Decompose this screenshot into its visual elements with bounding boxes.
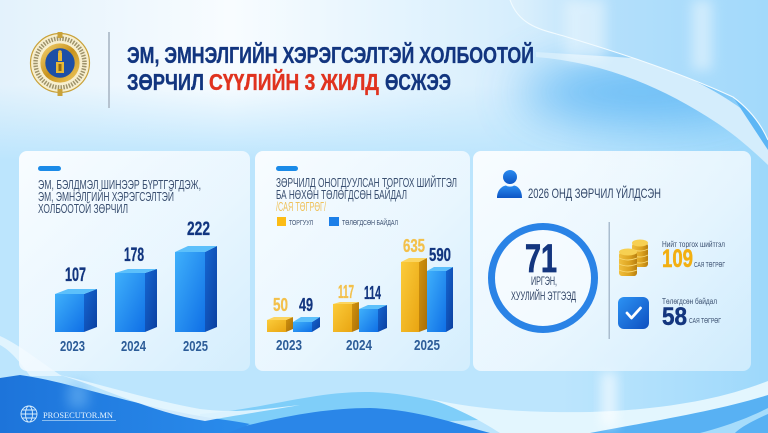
panel heading: 2026 ОНД ЗӨРЧИЛ ҮЙЛДСЭН (528, 184, 661, 201)
fine values (273, 236, 425, 315)
total fine label: Нийт торгох шийтгэл (662, 240, 725, 249)
fine values: 117 (338, 282, 354, 302)
paid label: Төлөгдсөн байдал (662, 297, 717, 306)
panel heading: ЭМ, БЭЛДМЭЛ ШИНЭЭР БҮРТГЭГДЭЖ, (38, 178, 201, 192)
bar values: 222 (187, 219, 210, 240)
total fine unit: САЯ ТӨГРӨГ (694, 262, 725, 269)
ring with 71 count (492, 226, 594, 330)
fine values: 635 (403, 236, 425, 256)
bars 2023 (267, 317, 320, 332)
legend: ТӨЛӨГДСӨН БАЙДАЛ (342, 218, 398, 227)
icon: check (618, 297, 649, 329)
panel: fines and payments (255, 151, 470, 371)
bar values: 107 (65, 265, 86, 286)
paid unit: САЯ ТӨГРӨГ (689, 318, 721, 325)
year labels: 2024 (346, 337, 373, 354)
panel heading: /САЯ ТӨГРӨГ/ (276, 200, 326, 214)
panel accent (38, 166, 61, 171)
legend (277, 217, 398, 227)
title: ЭМ, ЭМНЭЛГИЙН ХЭРЭГСЭЛТЭЙ ХОЛБООТОЙ (127, 41, 534, 68)
paid value: 58 (662, 303, 687, 331)
panel: registered violations (19, 151, 250, 371)
footer site mark (21, 406, 116, 422)
paid values (299, 245, 451, 315)
title (127, 41, 534, 95)
icon: coins (619, 240, 648, 276)
paid values: 590 (429, 245, 451, 265)
year labels: 2023 (276, 337, 302, 354)
panel heading: ЗӨРЧИЛД ОНОГДУУЛСАН ТОРГОХ ШИЙТГЭЛ (276, 175, 457, 190)
panel accent (276, 166, 298, 171)
ring with 71 count: ХУУЛИЙН ЭТГЭЭД (511, 288, 576, 303)
panel heading (276, 175, 457, 214)
bar 2023 (55, 289, 97, 332)
paid values: 114 (364, 283, 381, 303)
header divider (108, 32, 110, 108)
paid values: 49 (299, 295, 313, 315)
year labels (276, 337, 440, 354)
bar values: 178 (124, 245, 144, 266)
bar 2024 (115, 269, 157, 332)
vertical divider (608, 222, 610, 339)
year labels: 2025 (414, 337, 440, 354)
title: ЗӨРЧИЛ (127, 69, 204, 95)
bar 2025 (175, 246, 217, 332)
bar values (65, 219, 210, 286)
title: СҮҮЛИЙН 3 ЖИЛД (209, 68, 379, 95)
fine values: 50 (273, 295, 288, 315)
year labels: 2023 (60, 338, 85, 355)
year labels: 2024 (121, 338, 146, 355)
panel heading: БА НӨХӨН ТӨЛӨГДСӨН БАЙДАЛ (276, 187, 407, 202)
icon: person (497, 170, 522, 198)
bars 2024 (333, 302, 387, 332)
year labels: 2025 (183, 338, 208, 355)
footer site mark: PROSECUTOR.MN (43, 410, 113, 420)
panel heading: ЭМ, ЭМНЭЛГИЙН ХЭРЭГСЭЛТЭЙ (38, 189, 174, 204)
panel: 2026 summary (473, 151, 751, 371)
panel heading: ХОЛБООТОЙ ЗӨРЧИЛ (38, 201, 128, 216)
panel heading (38, 178, 201, 216)
bars 2025 (401, 258, 453, 332)
ring with 71 count: ИРГЭН, (531, 274, 557, 288)
total fine value: 109 (662, 245, 693, 273)
legend: ТОРГУУЛ (289, 220, 313, 227)
ring with 71 count: 71 (525, 237, 557, 281)
emblem (30, 32, 90, 96)
title: ӨСЖЭЭ (385, 69, 451, 95)
year labels (60, 338, 208, 355)
